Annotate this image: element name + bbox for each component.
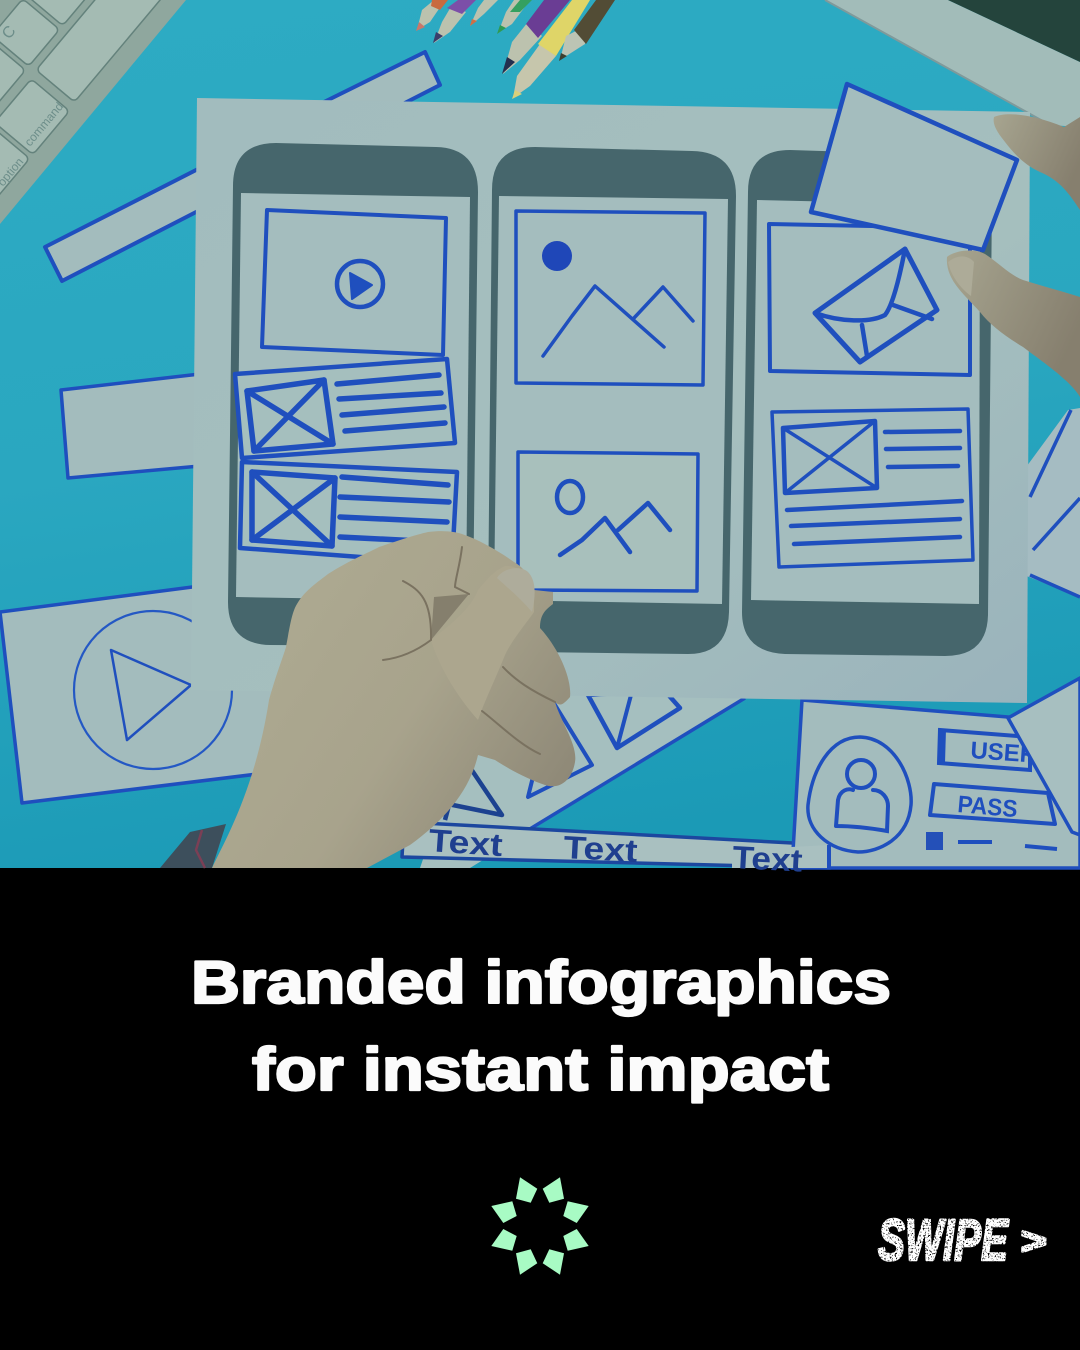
paper strip: hand-written Text labels: Text <box>428 822 504 863</box>
envelope box <box>769 224 970 375</box>
title <box>191 949 891 1103</box>
main paper sheet <box>191 98 1030 703</box>
finger creases <box>383 547 555 754</box>
list card 2 <box>240 462 457 560</box>
article card <box>772 409 973 567</box>
floating blank card <box>811 84 1017 250</box>
paper strip: upper left <box>45 52 440 281</box>
right hand fingers <box>947 114 1080 397</box>
left hand holding card <box>212 531 575 868</box>
paper card: login sketch <box>732 700 1080 879</box>
image box with sun and mountains <box>516 211 705 385</box>
paper card: login sketch: Text <box>732 839 804 879</box>
thumb <box>431 566 534 720</box>
thumbnail <box>497 568 535 612</box>
phone wireframe 2 <box>488 147 736 654</box>
top-right white bar <box>825 0 1080 127</box>
title: for instant impact <box>252 1036 829 1103</box>
paper rectangle: left <box>61 374 200 478</box>
logo: green eight-petal burst <box>491 1177 589 1275</box>
swipe call to action: SWIPE <box>878 1208 1010 1273</box>
paper card: lower triangles sketch <box>420 690 745 868</box>
image box small <box>518 452 698 591</box>
paper strip: hand-written Text labels <box>402 822 830 869</box>
paper strip: hand-written Text labels: Text <box>563 829 639 869</box>
phone wireframe 3 <box>742 150 992 656</box>
title: Branded infographics <box>191 949 891 1016</box>
keyboard: command <box>22 100 66 149</box>
paper card: large video sketch <box>0 586 290 803</box>
keyboard <box>0 0 186 224</box>
paper card: login sketch: USER <box>970 737 1038 769</box>
curled index finger shadow <box>431 594 469 640</box>
photo: hands arranging paper wireframes on a blue desk <box>0 0 1080 879</box>
paper card: right edge <box>1024 408 1080 597</box>
list card 1 <box>235 359 455 458</box>
sleeve cuff <box>160 824 226 868</box>
swipe call to action: > <box>1020 1221 1046 1263</box>
video box with play icon <box>262 210 446 355</box>
colored pencils <box>416 0 615 99</box>
paper card: right-edge corner <box>1008 678 1080 835</box>
phone wireframe 1 <box>228 143 478 646</box>
paper card: login sketch: PASS <box>956 791 1019 823</box>
